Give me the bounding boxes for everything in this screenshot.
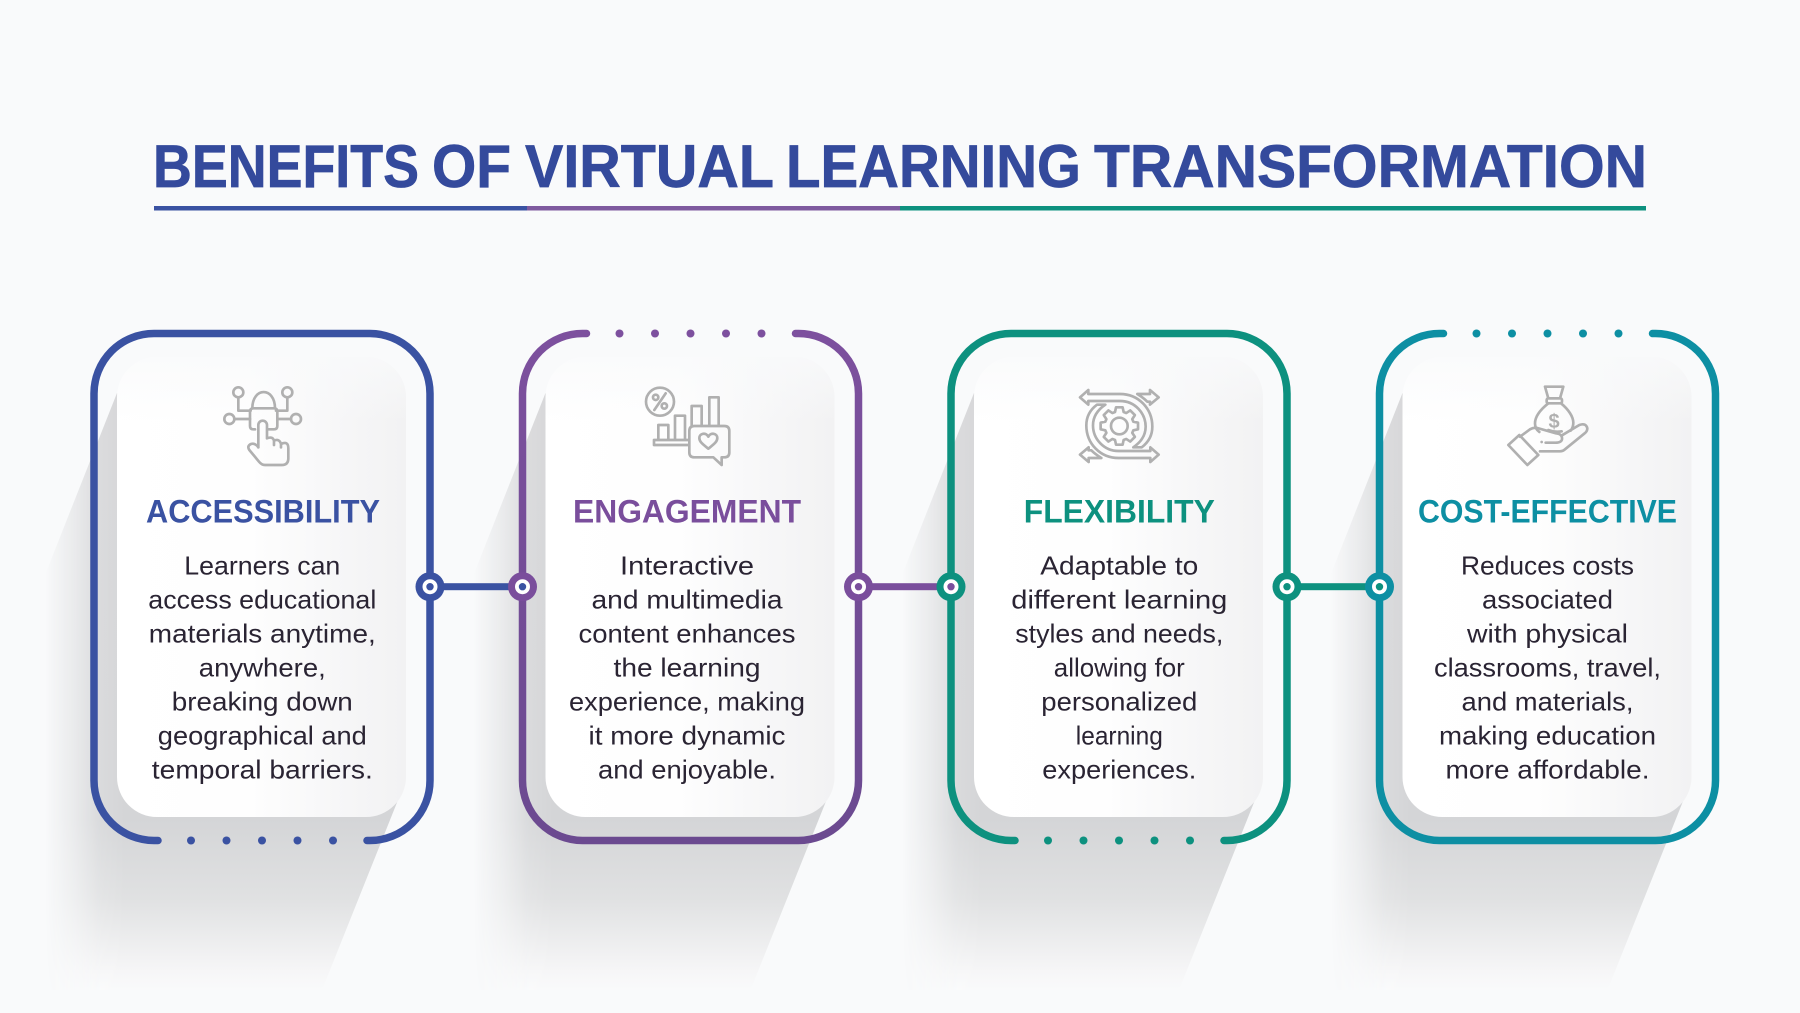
panel: flexibility (902, 334, 1287, 990)
description: allowing for (1054, 652, 1185, 682)
description: associated (1482, 584, 1613, 614)
icon: padlock network with pointing hand (224, 387, 301, 465)
description: access educational (148, 584, 376, 614)
outline with dots (94, 334, 430, 844)
description (1011, 550, 1227, 784)
heading: ENGAGEMENT (573, 494, 801, 530)
description: styles and needs, (1015, 618, 1223, 648)
heading: ACCESSIBILITY (146, 494, 380, 530)
description: experience, making (569, 686, 805, 716)
title (153, 133, 1647, 200)
description: different learning (1011, 584, 1227, 614)
description: with physical (1466, 618, 1628, 648)
description: classrooms, travel, (1434, 652, 1661, 682)
card shadow (45, 393, 398, 990)
panel: accessibility (45, 334, 430, 990)
title: VIRTUAL (525, 133, 774, 200)
panel: engagement (474, 330, 858, 990)
description: Adaptable to (1040, 550, 1198, 580)
panel: cost-effective (1330, 330, 1716, 990)
description: Learners can (184, 550, 340, 580)
description (1434, 550, 1661, 784)
connector: accessibility to engagement (416, 572, 537, 601)
inner card (974, 357, 1263, 817)
icon: gear with circular arrows (1080, 390, 1159, 462)
icon: percent, bar chart and heart bubble (646, 388, 729, 465)
description: learning (1076, 720, 1163, 750)
description: breaking down (172, 686, 353, 716)
icon: hand holding money bag (1508, 387, 1587, 465)
card shadow (474, 393, 826, 990)
description: personalized (1041, 686, 1197, 716)
outline with dots (522, 330, 858, 840)
description (569, 550, 805, 784)
icon: dollar sign: $ (1548, 411, 1560, 433)
connector: flexibility to cost-effective (1272, 572, 1394, 601)
description (148, 550, 376, 784)
description: geographical and (158, 720, 367, 750)
description: materials anytime, (149, 618, 376, 648)
connector: engagement to flexibility (844, 572, 966, 601)
title underline (154, 206, 1646, 210)
description: the learning (614, 652, 760, 682)
description: Reduces costs (1461, 550, 1634, 580)
description: content enhances (578, 618, 796, 648)
inner card (117, 357, 406, 817)
description: making education (1439, 720, 1656, 750)
outline with dots (951, 334, 1287, 844)
description: Interactive (620, 550, 754, 580)
title: TRANSFORMATION (1094, 133, 1647, 200)
description: more affordable. (1446, 754, 1650, 784)
outline with dots (1380, 330, 1716, 840)
heading: COST-EFFECTIVE (1418, 494, 1677, 530)
title: LEARNING (786, 133, 1081, 200)
description: and enjoyable. (598, 754, 776, 784)
description: and multimedia (592, 584, 783, 614)
description: it more dynamic (588, 720, 786, 750)
card shadow (1330, 393, 1684, 990)
title: BENEFITS (153, 133, 419, 200)
description: temporal barriers. (152, 754, 373, 784)
description: experiences. (1042, 754, 1196, 784)
title: OF (432, 133, 511, 200)
description: anywhere, (199, 652, 326, 682)
card shadow (902, 393, 1255, 990)
description: and materials, (1462, 686, 1634, 716)
inner card (546, 357, 834, 817)
inner card (1402, 357, 1692, 817)
heading: FLEXIBILITY (1024, 494, 1215, 530)
